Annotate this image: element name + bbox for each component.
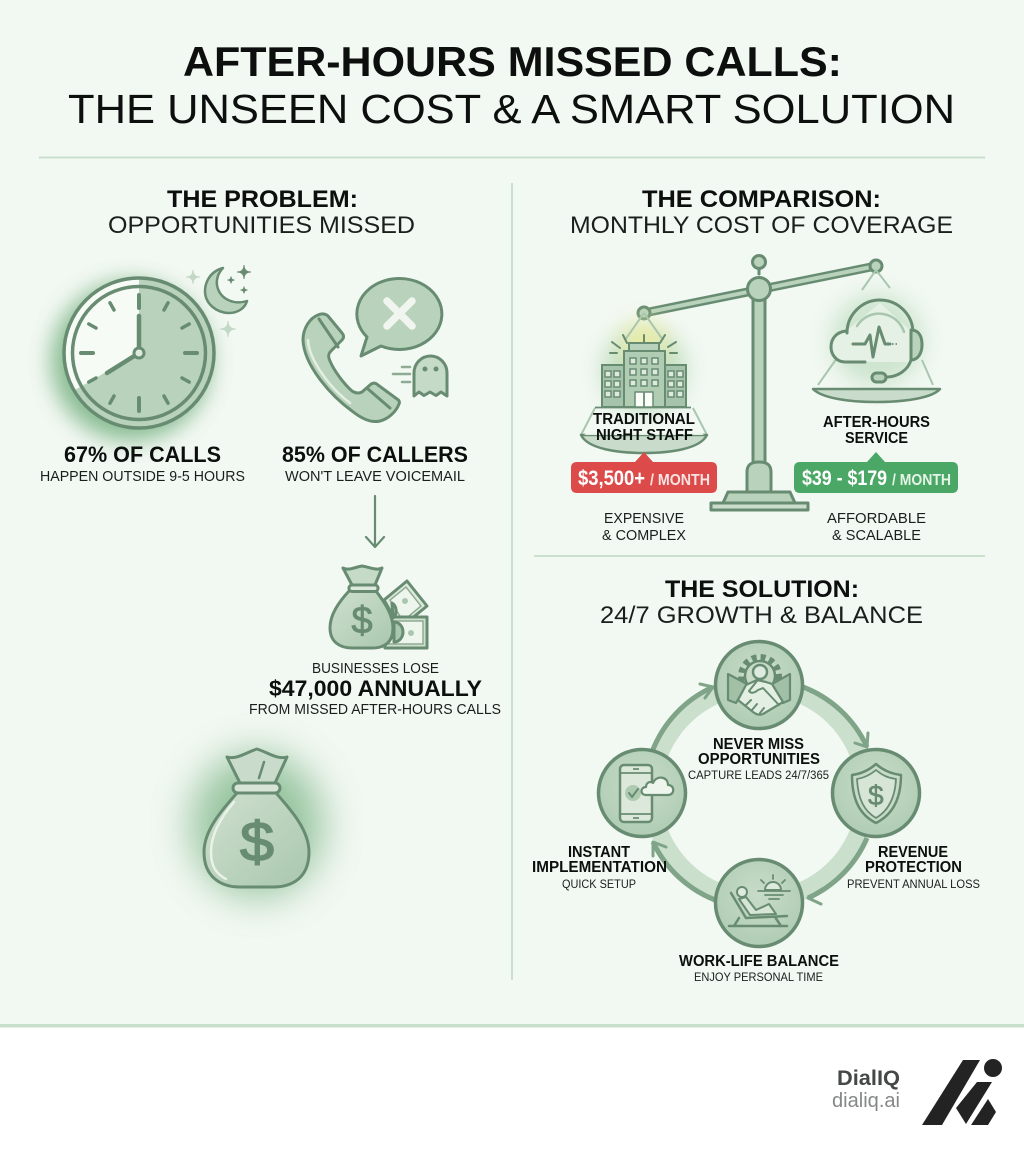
step text: never miss opportunities: OPPORTUNITIES — [698, 751, 820, 768]
icon: money bag with banknotes: $ — [352, 600, 373, 642]
title: THE UNSEEN COST & A SMART SOLUTION — [68, 86, 955, 132]
callout: annual loss: BUSINESSES LOSE — [312, 661, 439, 677]
label: after-hours service: SERVICE — [845, 430, 908, 447]
icon: money bag with banknotes — [330, 566, 427, 648]
step text: instant implementation — [532, 844, 667, 891]
stat: 85% of callers: 85% OF CALLERS — [282, 442, 468, 467]
price badge: $3,500+ per month — [571, 452, 717, 493]
note: affordable and scalable: & SCALABLE — [832, 528, 921, 544]
icon: clock with night shading — [51, 278, 214, 441]
note: affordable and scalable: AFFORDABLE — [827, 511, 926, 527]
icon: large glowing money bag — [191, 749, 323, 897]
footer brand text — [832, 1066, 900, 1112]
label: after-hours service — [823, 414, 930, 447]
step text: never miss opportunities: CAPTURE LEADS 24/7/365 — [688, 770, 829, 782]
panel: the problem — [40, 186, 501, 897]
icon: phone with missed-call bubble — [303, 278, 447, 422]
icon: large glowing money bag: $ — [240, 810, 274, 873]
arrow: leads to loss — [366, 496, 384, 547]
note: expensive and complex — [602, 511, 686, 544]
label: traditional night staff: TRADITIONAL — [593, 411, 695, 428]
step text: instant implementation: QUICK SETUP — [562, 879, 636, 891]
heading: the problem — [108, 186, 415, 239]
callout: annual loss: $47,000 ANNUALLY — [269, 676, 482, 701]
label: traditional night staff — [593, 411, 695, 444]
price badge: $39 - $179 per month — [794, 452, 958, 493]
heading: the comparison — [570, 186, 953, 239]
heading: the comparison: THE COMPARISON: — [642, 186, 881, 213]
note: affordable and scalable — [827, 511, 926, 544]
step icon: handshake and gear — [716, 642, 802, 728]
step text: instant implementation: IMPLEMENTATION — [532, 859, 667, 876]
footer brand text: dialiq.ai — [832, 1089, 900, 1112]
step text: revenue protection: PREVENT ANNUAL LOSS — [847, 879, 980, 891]
callout: annual loss — [249, 661, 501, 718]
note: expensive and complex: EXPENSIVE — [604, 511, 684, 527]
step icon: relaxing on lounge chair — [716, 860, 802, 946]
footer brand text: DialIQ — [837, 1066, 900, 1090]
heading: the problem: OPPORTUNITIES MISSED — [108, 212, 415, 239]
logo: DialIQ mark — [922, 1059, 1002, 1125]
step icon: shield with dollar: $ — [868, 780, 884, 811]
left scale pan — [581, 425, 707, 453]
label: after-hours service: AFTER-HOURS — [823, 414, 930, 431]
cycle ring with arrows — [652, 684, 868, 904]
icon: crescent moon and stars — [186, 265, 251, 337]
heading: the solution — [600, 576, 923, 629]
icon: cloud headset on right pan — [818, 270, 933, 386]
panel: the solution — [532, 576, 980, 984]
step text: revenue protection: REVENUE — [878, 844, 948, 861]
step icon: phone and cloud — [598, 750, 686, 836]
title — [68, 38, 955, 132]
heading: the comparison: MONTHLY COST OF COVERAGE — [570, 212, 953, 239]
footer band — [0, 1024, 1024, 1154]
stat: 85% of callers: WON'T LEAVE VOICEMAIL — [285, 469, 465, 485]
note: expensive and complex: & COMPLEX — [602, 528, 686, 544]
icon: office building on left pan — [581, 313, 707, 435]
step text: revenue protection: PROTECTION — [865, 859, 962, 876]
stat: 67% of calls — [40, 442, 245, 485]
panel: the comparison — [570, 186, 958, 544]
title: AFTER-HOURS MISSED CALLS: — [183, 38, 842, 85]
price badge: $3,500+ per month: $3,500+ — [578, 467, 645, 490]
callout: annual loss: FROM MISSED AFTER-HOURS CALLS — [249, 702, 501, 718]
price badge: $39 - $179 per month: / MONTH — [892, 472, 951, 489]
step text: revenue protection — [847, 844, 980, 891]
step text: instant implementation: INSTANT — [568, 844, 630, 861]
step text: work-life balance: ENJOY PERSONAL TIME — [694, 972, 823, 984]
step text: never miss opportunities: NEVER MISS — [713, 736, 804, 753]
heading: the problem: THE PROBLEM: — [167, 186, 358, 213]
label: traditional night staff: NIGHT STAFF — [596, 427, 693, 444]
step text: work-life balance: WORK-LIFE BALANCE — [679, 953, 839, 970]
stat: 85% of callers — [282, 442, 468, 485]
price badge: $39 - $179 per month: $39 - $179 — [802, 467, 887, 490]
heading: the solution: THE SOLUTION: — [665, 576, 859, 603]
stat: 67% of calls: HAPPEN OUTSIDE 9-5 HOURS — [40, 469, 245, 485]
stat: 67% of calls: 67% OF CALLS — [64, 442, 221, 467]
step icon: shield with dollar — [832, 750, 920, 836]
heading: the solution: 24/7 GROWTH & BALANCE — [600, 602, 923, 629]
step text: never miss opportunities — [688, 736, 829, 782]
right scale pan — [813, 389, 940, 402]
price badge: $3,500+ per month: / MONTH — [650, 472, 710, 489]
step text: work-life balance — [679, 953, 839, 984]
balance scale — [638, 256, 882, 510]
